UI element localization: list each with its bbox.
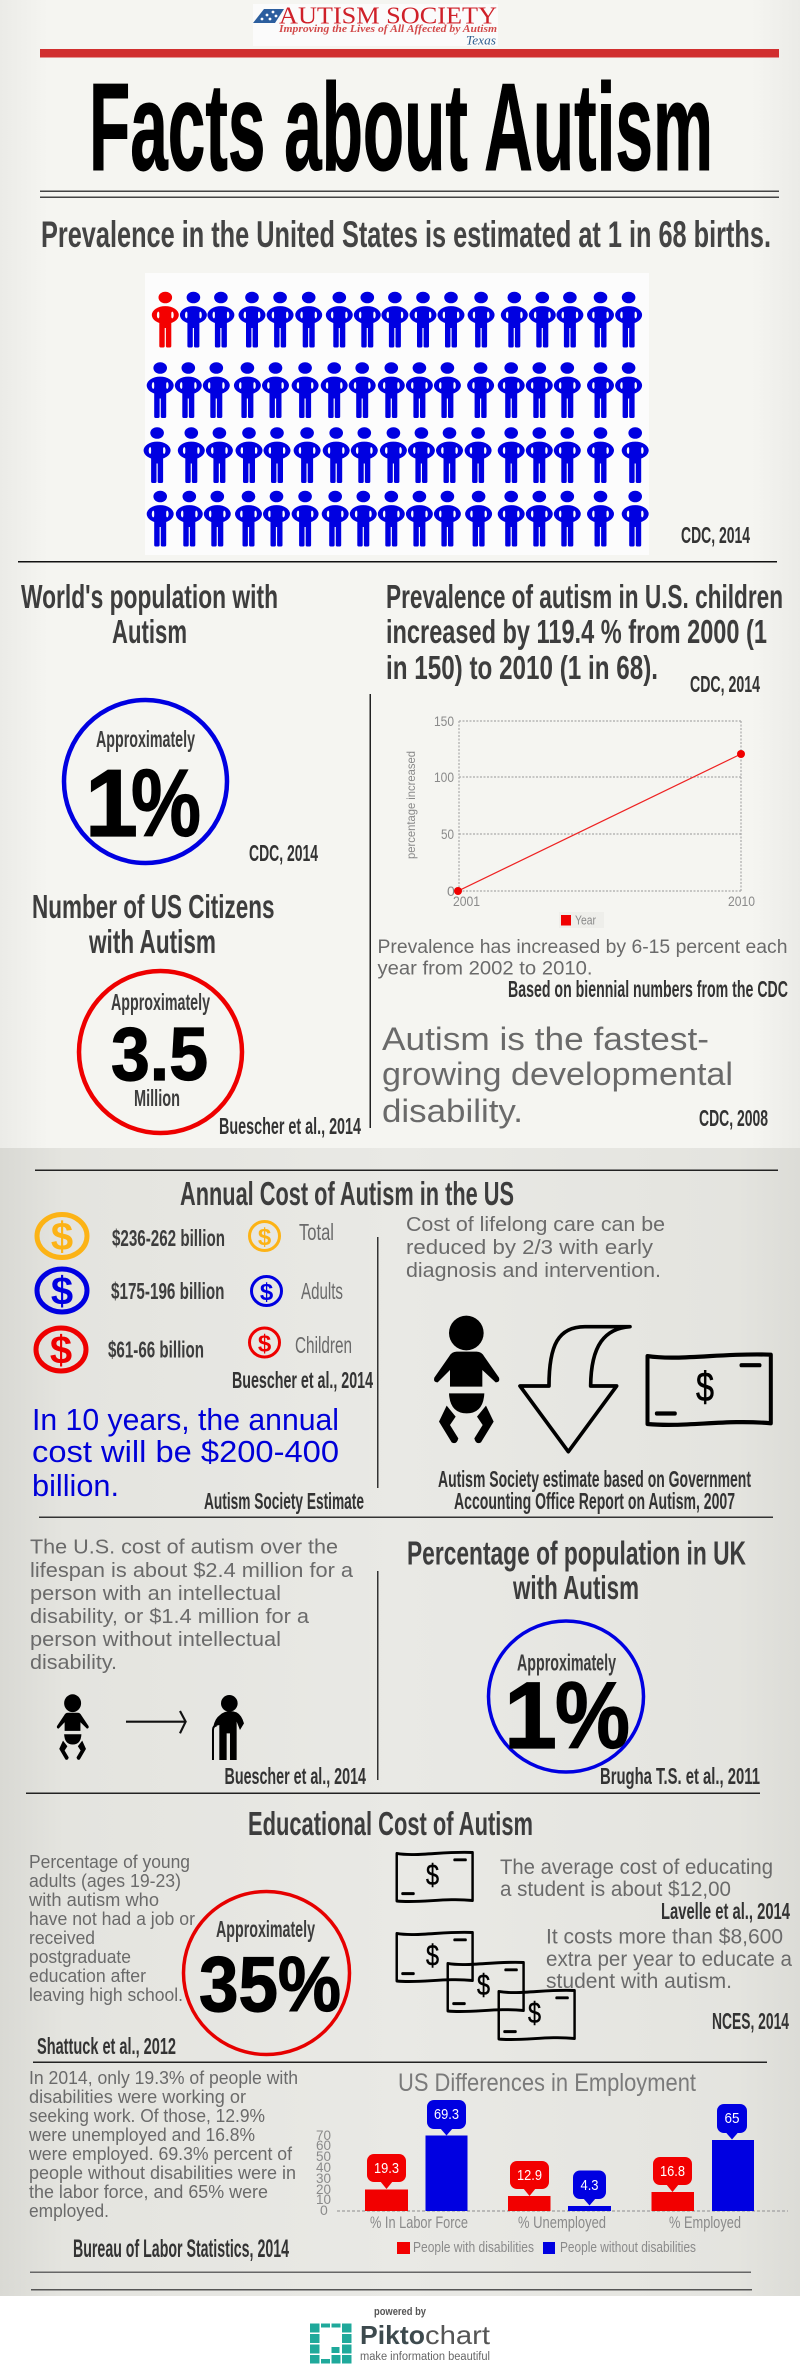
data label 19.3: 19.3 xyxy=(374,2160,399,2177)
text: employment summary: were employed. 69.3% percent of xyxy=(28,2144,293,2164)
icon: red coin large xyxy=(36,1328,86,1372)
text: lifespan cost: disability, or $1.4 million for a xyxy=(30,1606,310,1628)
page background: upper section xyxy=(0,0,800,1148)
icon: three dollar bills: $ xyxy=(528,1997,541,2030)
icon: red coin small: $ xyxy=(258,1330,272,1358)
stat: 35 percent xyxy=(184,1892,350,2054)
data point 2001 xyxy=(454,887,462,895)
text: prevalence note xyxy=(378,937,788,980)
citation: CDC, 2014 xyxy=(249,840,318,866)
y axis labels: 0 xyxy=(320,2202,328,2218)
icon row 4 xyxy=(147,491,649,546)
stat label: Approximately xyxy=(111,989,210,1015)
text: young adults: with autism who xyxy=(28,1890,159,1910)
citation: CDC, 2014 xyxy=(681,522,750,548)
y axis labels: 50 xyxy=(316,2148,331,2164)
y axis labels: 100 xyxy=(434,769,454,785)
text: 10 year projection: billion. xyxy=(32,1468,119,1503)
text: average cost xyxy=(500,1856,773,1901)
stat: UK 1 percent xyxy=(488,1621,644,1772)
y axis labels xyxy=(434,713,455,899)
legend: People without disabilities xyxy=(560,2239,696,2256)
text: lifespan cost xyxy=(30,1536,354,1674)
heading: US citizens: Number of US Citizens xyxy=(32,888,274,925)
text: lifelong care xyxy=(406,1214,665,1282)
y axis labels xyxy=(316,2127,331,2218)
icon: down arrow xyxy=(520,1327,630,1452)
text: lifespan cost: person with an intellectual xyxy=(30,1583,281,1605)
text: employment summary: people without disabilities were in xyxy=(29,2163,296,2183)
text: prevalence note: year from 2002 to 2010. xyxy=(378,958,592,980)
x axis labels: % In Labor Force xyxy=(370,2213,468,2232)
text: lifelong care: diagnosis and intervention. xyxy=(406,1260,661,1282)
data line xyxy=(458,754,741,891)
stat label: Approximately xyxy=(96,726,195,752)
icon: small baby xyxy=(57,1694,89,1760)
citation xyxy=(438,1466,751,1514)
text: extra cost: student with autism. xyxy=(546,1970,732,1993)
heading: annual cost: Annual Cost of Autism in the US xyxy=(180,1175,514,1212)
text: employment summary xyxy=(28,2068,298,2221)
footer: Piktochart credit xyxy=(310,2306,491,2364)
text: lifelong care: Cost of lifelong care can be xyxy=(406,1214,665,1236)
icon: blue coin large: $ xyxy=(51,1270,73,1314)
icon: dollar bill single: $ xyxy=(426,1859,439,1892)
data label 12.9: 12.9 xyxy=(517,2167,542,2184)
value children: $61-66 billion xyxy=(108,1336,204,1362)
text: employment summary: employed. xyxy=(29,2201,109,2221)
panel: pictogram 1 in 68 xyxy=(144,273,649,555)
y axis labels: 70 xyxy=(316,2127,331,2143)
powered by label: powered by xyxy=(374,2306,427,2318)
data point 2010 xyxy=(737,750,745,758)
stat value: 35% xyxy=(199,1940,341,2028)
stat value: 3.5 xyxy=(111,1012,208,1096)
text: lifespan cost: The U.S. cost of autism over the xyxy=(30,1536,338,1558)
page background: lower section xyxy=(0,1148,800,2296)
x axis labels: % Employed xyxy=(669,2213,741,2232)
icon: orange coin small: $ xyxy=(258,1224,272,1251)
text: lifespan cost: disability. xyxy=(30,1652,117,1674)
y axis labels: 50 xyxy=(441,826,454,842)
legend total: Total xyxy=(299,1219,334,1245)
heading: US citizens: with Autism xyxy=(88,923,216,960)
text: employment summary: were unemployed and 16.8% xyxy=(28,2125,255,2145)
text: fastest growing: growing developmental xyxy=(382,1056,733,1092)
arrow: baby to elder xyxy=(126,1711,186,1733)
icon: star flag xyxy=(253,9,284,23)
text: young adults: postgraduate xyxy=(29,1947,131,1967)
text: employment summary: seeking work. Of those, 12.9% xyxy=(29,2106,265,2126)
citation: Buescher et al., 2014 xyxy=(224,1763,366,1789)
x axis labels xyxy=(370,2213,741,2232)
stat value: % xyxy=(555,1663,630,1769)
stat: 3.5 million xyxy=(79,971,242,1133)
text: employment summary: the labor force, and 65% were xyxy=(29,2182,268,2202)
text: young adults: adults (ages 19-23) xyxy=(29,1871,181,1891)
text: young adults: Percentage of young xyxy=(29,1852,190,1872)
legend adults: Adults xyxy=(301,1278,343,1304)
text: extra cost: It costs more than $8,600 xyxy=(546,1926,783,1948)
text: lifespan cost: person without intellectual xyxy=(30,1629,281,1651)
text: 10 year projection: cost will be $200-400 xyxy=(32,1434,339,1469)
text: lifelong care: reduced by 2/3 with early xyxy=(406,1237,653,1259)
citation: Buescher et al., 2014 xyxy=(219,1113,361,1139)
Piktochart tagline: make information beautiful xyxy=(360,2351,490,2363)
citation: Autism Society Estimate xyxy=(204,1488,364,1514)
stat label: Approximately xyxy=(517,1650,616,1676)
text: employment summary: In 2014, only 19.3% of people with xyxy=(29,2068,298,2088)
heading: UK population: with Autism xyxy=(512,1569,639,1606)
text: 10 year projection: In 10 years, the annual xyxy=(32,1402,339,1437)
text: 10 year projection xyxy=(32,1402,339,1503)
heading: US citizens xyxy=(32,888,274,960)
text: lifespan cost: lifespan is about $2.4 million for a xyxy=(30,1560,354,1582)
bars xyxy=(365,2136,754,2211)
stat value: 1 xyxy=(504,1663,557,1769)
icon: blue coin small xyxy=(252,1276,282,1306)
data label 69.3 xyxy=(427,2100,466,2136)
icon: red coin small xyxy=(250,1328,280,1358)
icon: dollar bill xyxy=(647,1354,771,1425)
x axis labels xyxy=(453,893,755,909)
logo wordmark: AUTISM SOCIETY xyxy=(279,4,497,30)
icon row 3 xyxy=(144,427,649,483)
icon: dollar bill single xyxy=(397,1852,473,1902)
logo: Autism Society Texas xyxy=(253,4,498,48)
y axis labels: 0 xyxy=(447,883,455,899)
heading: UK population xyxy=(407,1534,746,1606)
value adults: $175-196 billion xyxy=(111,1278,224,1304)
icon: orange coin small xyxy=(250,1222,280,1251)
y axis labels: 60 xyxy=(316,2137,331,2153)
legend xyxy=(559,912,604,928)
heading: prevalence increase: in 150) to 2010 (1 in 68). xyxy=(386,649,658,686)
text: extra cost xyxy=(546,1926,792,1993)
text: average cost: The average cost of educating xyxy=(500,1856,773,1879)
chart title: US Differences in Employment xyxy=(398,2069,696,2097)
citation: Buescher et al., 2014 xyxy=(232,1367,373,1393)
text: employment summary: disabilities were working or xyxy=(29,2087,246,2107)
red header bar xyxy=(40,49,779,58)
data label 4.3: 4.3 xyxy=(580,2177,598,2194)
heading: world population: World's population with xyxy=(21,578,278,615)
bar chart: US differences in employment xyxy=(316,2069,788,2256)
heading: world population xyxy=(21,578,278,650)
icon: elder with cane xyxy=(213,1695,244,1760)
icon: three dollar bills xyxy=(397,1932,575,2040)
text: young adults: received xyxy=(29,1928,95,1948)
icon row 2 xyxy=(147,362,642,418)
legend: People with disabilities xyxy=(413,2239,534,2256)
legend xyxy=(397,2239,696,2256)
y axis labels: 30 xyxy=(316,2170,331,2186)
heading: educational cost: Educational Cost of Autism xyxy=(248,1805,533,1842)
stat label: Approximately xyxy=(216,1916,315,1942)
icon: three dollar bills: $ xyxy=(477,1969,490,2002)
text: extra cost: extra per year to educate a xyxy=(546,1948,792,1971)
icon: red coin large: $ xyxy=(50,1328,72,1372)
icon: orange coin large xyxy=(37,1214,87,1259)
x axis labels: 2001 xyxy=(453,893,480,909)
x axis labels: 2010 xyxy=(728,893,755,909)
text: fastest growing xyxy=(382,1021,733,1129)
y axis labels: 150 xyxy=(434,713,454,729)
y axis labels: 40 xyxy=(316,2159,331,2175)
data label 65 xyxy=(717,2104,747,2140)
Piktochart wordmark light: chart xyxy=(425,2320,491,2350)
icon: dollar bill: $ xyxy=(696,1363,714,1410)
x axis labels: % Unemployed xyxy=(518,2213,606,2232)
stat: world 1 percent xyxy=(64,700,227,863)
icon: baby xyxy=(434,1316,499,1443)
stat value: 1 xyxy=(85,750,138,857)
y axis labels: 10 xyxy=(316,2191,331,2207)
stat unit: Million xyxy=(134,1085,180,1111)
citation: Shattuck et al., 2012 xyxy=(37,2033,176,2059)
citation: Bureau of Labor Statistics, 2014 xyxy=(73,2235,289,2263)
Piktochart wordmark: Pikto xyxy=(360,2320,425,2350)
text: young adults: have not had a job or xyxy=(29,1909,195,1929)
data label 69.3: 69.3 xyxy=(434,2106,459,2123)
icon: blue coin large xyxy=(37,1269,87,1314)
data label 12.9 xyxy=(510,2161,549,2196)
y axis labels: 20 xyxy=(316,2181,331,2197)
stat value: % xyxy=(131,750,201,857)
data label 65: 65 xyxy=(724,2110,740,2127)
value total: $236-262 billion xyxy=(112,1225,225,1251)
data label 16.8: 16.8 xyxy=(660,2163,685,2180)
heading: prevalence increase xyxy=(386,578,783,686)
logo state: Texas xyxy=(466,32,496,48)
line chart: prevalence increase xyxy=(404,713,755,928)
text: average cost: a student is about $12,00 xyxy=(500,1878,731,1901)
logo tagline: Improving the Lives of All Affected by Autism xyxy=(278,24,497,35)
heading: world population: Autism xyxy=(112,613,187,650)
text: fastest growing: Autism is the fastest- xyxy=(382,1021,709,1057)
text: young adults: education after xyxy=(29,1966,146,1986)
text: young adults xyxy=(28,1852,195,2005)
panel: annual cost figures xyxy=(36,1214,352,1372)
data label 16.8 xyxy=(653,2157,692,2192)
text: young adults: leaving high school. xyxy=(29,1985,183,2005)
icon: Piktochart logo xyxy=(310,2324,352,2364)
icon: orange coin large: $ xyxy=(51,1215,73,1259)
icon: blue coin small: $ xyxy=(260,1279,274,1306)
page background: footer xyxy=(0,2296,800,2376)
y axis title: percentage increased xyxy=(404,751,418,859)
icon: three dollar bills: $ xyxy=(426,1940,439,1972)
data label 19.3 xyxy=(367,2154,406,2189)
legend: Year xyxy=(575,912,597,928)
legend children: Children xyxy=(295,1332,352,1358)
data label 4.3 xyxy=(573,2170,606,2206)
icon row 1 xyxy=(152,292,642,348)
text: prevalence note: Prevalence has increased by 6-15 percent each xyxy=(378,937,788,958)
text: fastest growing: disability. xyxy=(382,1093,523,1129)
